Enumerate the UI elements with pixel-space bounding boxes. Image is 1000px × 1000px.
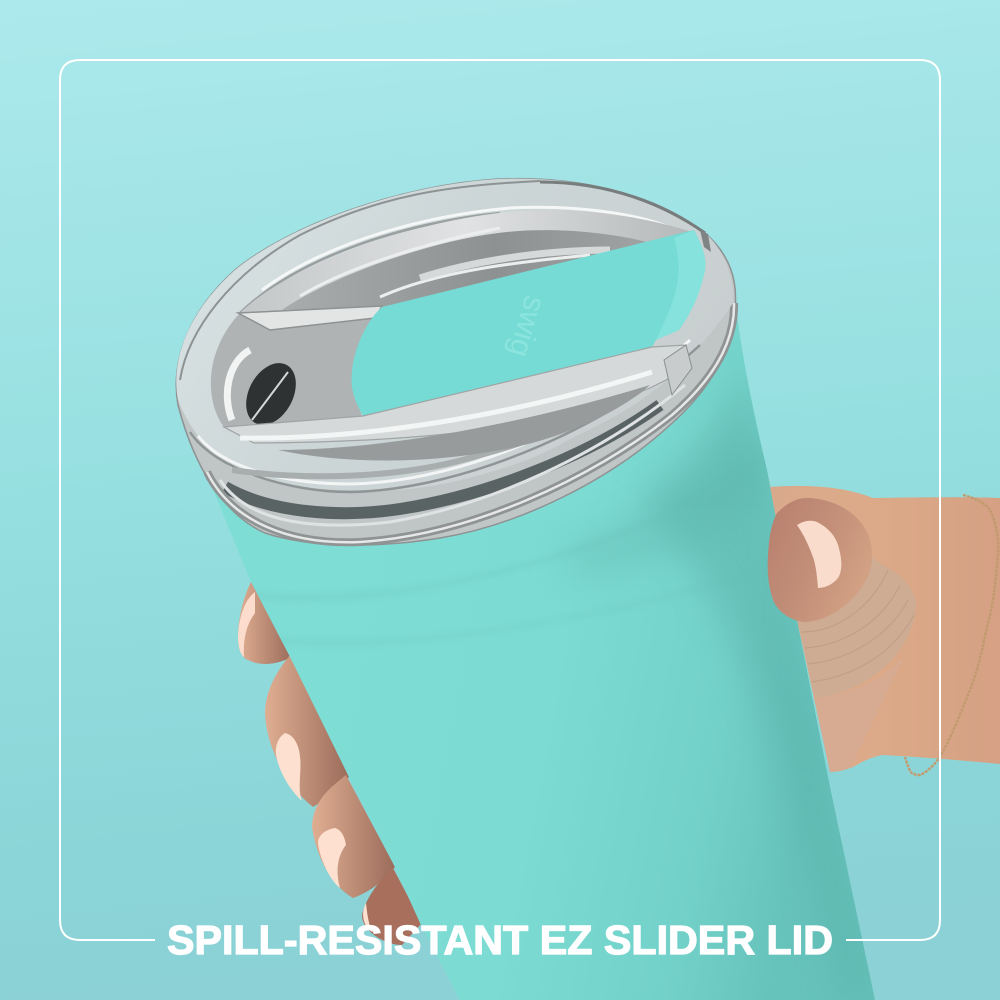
slider logo: swig — [502, 292, 553, 361]
thumbnail — [797, 521, 841, 588]
lid interior dark window — [282, 230, 668, 310]
spout rim — [227, 350, 250, 420]
white rounded frame — [60, 60, 940, 940]
slider lip — [656, 230, 705, 340]
spout well — [211, 307, 382, 427]
spout reflection — [252, 372, 288, 420]
wrinkle lines — [802, 570, 914, 682]
finger 2 — [265, 655, 349, 807]
hand: thumb and wrist — [767, 470, 1000, 775]
lower palm — [815, 655, 905, 772]
lower slider bar — [224, 345, 690, 443]
finger 4 — [362, 868, 422, 945]
lid interior — [240, 210, 692, 320]
finger 3 — [312, 775, 395, 898]
fingernail 3 — [318, 828, 346, 888]
caption: SPILL-RESISTANT EZ SLIDER LID — [167, 917, 833, 963]
lid top surface — [176, 179, 733, 491]
lower dark gasket band — [225, 405, 660, 513]
vent bridge — [238, 306, 382, 330]
gray reflection under the bar — [278, 385, 650, 461]
lid interior reflections — [300, 228, 610, 297]
bracelet — [905, 495, 998, 775]
slider — [351, 230, 705, 416]
bar end cap — [664, 345, 692, 395]
steel ring — [207, 303, 734, 542]
tumbler lid — [176, 179, 736, 545]
finger 1 — [238, 580, 292, 664]
lip highlights — [180, 181, 705, 492]
fingernail 2 — [276, 733, 302, 801]
fingernail 4 — [363, 903, 372, 932]
fingernail 1 — [238, 592, 255, 657]
tumbler body — [205, 300, 880, 1000]
spout opening — [236, 355, 306, 433]
lid notch — [700, 230, 711, 252]
thumb pad — [768, 498, 872, 622]
wrinkled skin under thumb — [798, 557, 916, 698]
body shading — [250, 360, 880, 1000]
lid base — [176, 179, 736, 545]
hand: fingers behind the tumbler — [238, 580, 422, 945]
bar highlight — [240, 372, 652, 438]
palm — [767, 470, 1000, 772]
